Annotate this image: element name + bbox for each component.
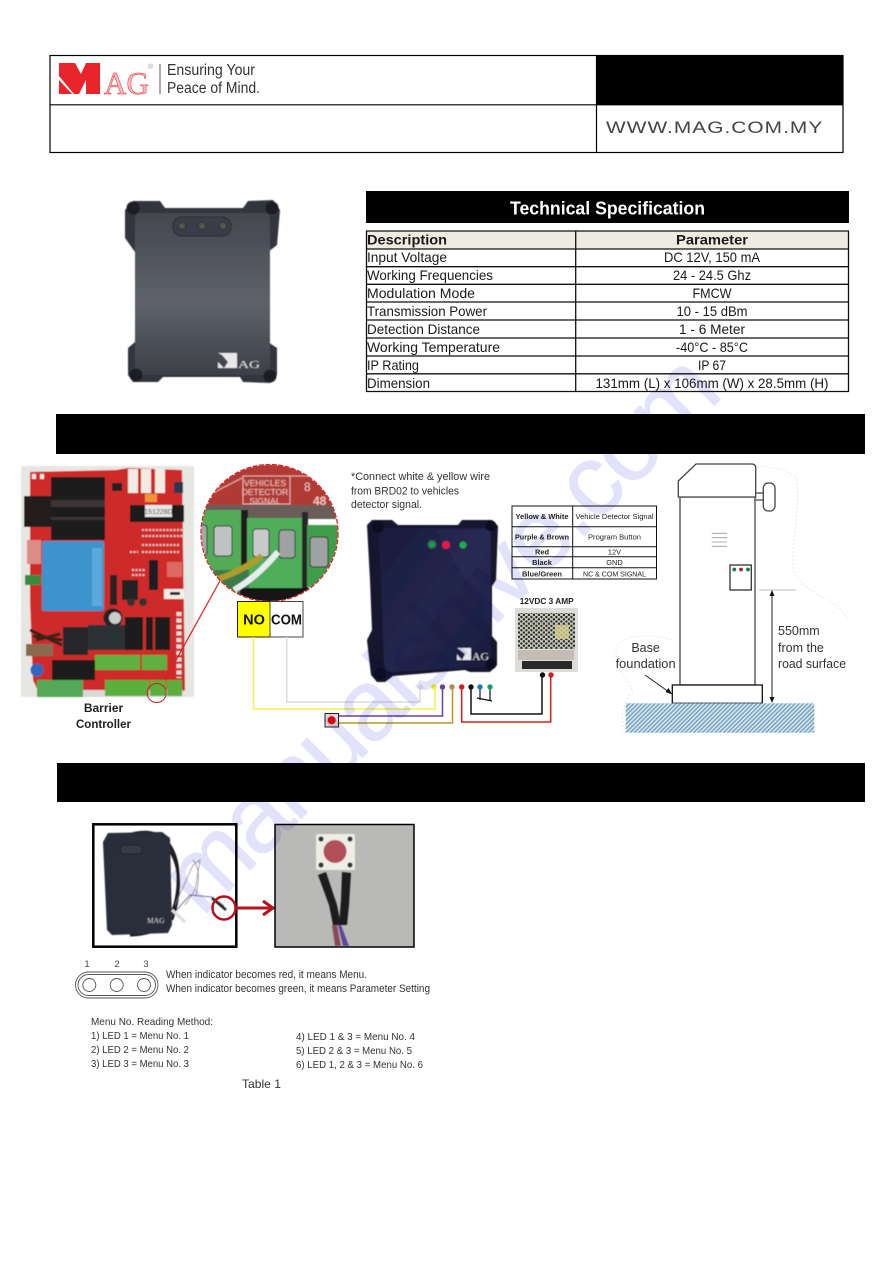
- connection note: [351, 471, 490, 511]
- wire colour table: Purple & Brown: [515, 532, 569, 542]
- barrier controller label: Barrier: [84, 701, 124, 715]
- printed board text: [242, 478, 327, 508]
- BRD02 device with LEDs: [367, 520, 498, 682]
- base foundation label: Base: [631, 641, 660, 655]
- table caption: Table 1: [242, 1077, 281, 1091]
- photo: push button: [275, 824, 414, 947]
- blue transformer: [42, 541, 104, 611]
- specification table: 24 - 24.5 Ghz: [673, 267, 751, 283]
- ic chip: [130, 505, 184, 522]
- base foundation block: [672, 685, 762, 703]
- NO COM terminal labels: NO: [243, 612, 265, 628]
- MAG logo: AG: [104, 65, 149, 101]
- device logo: [457, 648, 489, 663]
- green terminals: [37, 655, 182, 697]
- specification table: Dimension: [367, 375, 430, 391]
- height label: 550mm: [778, 624, 820, 638]
- specification table: Transmission Power: [367, 303, 487, 319]
- specification table: -40°C - 85°C: [676, 339, 748, 355]
- sensor on barrier: [730, 565, 751, 590]
- power supply: 12VDC 3 AMP: [520, 596, 574, 606]
- photo: device with cable: MAG: [147, 916, 165, 925]
- relays: [24, 477, 105, 540]
- technical specification heading: Technical Specification: [510, 198, 705, 218]
- wire colour table: Vehicle Detector Signal: [576, 512, 654, 521]
- menu reading method left: Menu No. Reading Method:: [91, 1016, 213, 1028]
- indicator colour explanation: When indicator becomes green, it means Parameter Setting: [166, 983, 430, 995]
- specification table: 1 - 6 Meter: [679, 321, 745, 337]
- technical specification heading: [366, 191, 849, 223]
- product photo: [125, 200, 280, 383]
- indicator colour explanation: When indicator becomes red, it means Menu.: [166, 969, 367, 981]
- NO COM terminal labels: [238, 602, 303, 637]
- wire colour table: Black: [532, 558, 553, 567]
- printed board text: DETECTOR: [242, 487, 288, 497]
- specification table: IP Rating: [367, 357, 419, 373]
- base foundation label: [616, 641, 676, 671]
- LED indicator diagram: 3: [143, 959, 149, 970]
- power supply: [515, 596, 578, 672]
- tagline: Ensuring Your: [167, 62, 255, 79]
- specification table: [366, 231, 849, 392]
- specification table: Working Frequencies: [367, 267, 493, 283]
- specification table: Input Voltage: [367, 249, 447, 265]
- specification table: 10 - 15 dBm: [676, 303, 748, 319]
- printed board text: 48: [313, 494, 327, 508]
- height label: road surface: [778, 657, 846, 671]
- NO COM terminal labels: COM: [271, 612, 302, 628]
- menu reading method right: 4) LED 1 & 3 = Menu No. 4: [296, 1031, 415, 1043]
- LED indicator diagram: 2: [114, 959, 120, 970]
- menu reading method right: [296, 1031, 423, 1071]
- ground hatch: [626, 703, 814, 733]
- product logo: AG: [238, 359, 260, 371]
- barrier controller board photo: [21, 466, 194, 697]
- program button symbol: [325, 714, 338, 727]
- height label: from the: [778, 641, 824, 655]
- connection note: from BRD02 to vehicles: [351, 486, 459, 498]
- printed board text: 8: [304, 480, 311, 494]
- menu reading method left: [91, 1016, 213, 1070]
- LED indicator diagram: [76, 959, 158, 998]
- foundation arrow: [645, 675, 672, 694]
- small components: [25, 530, 184, 678]
- device logo: AG: [472, 651, 489, 663]
- product logo: [218, 353, 260, 371]
- menu reading method right: 5) LED 2 & 3 = Menu No. 5: [296, 1045, 412, 1057]
- specification table: Modulation Mode: [367, 285, 475, 301]
- photo: device with cable: [93, 824, 236, 947]
- specification table: FMCW: [692, 285, 732, 301]
- menu reading method left: 3) LED 3 = Menu No. 3: [91, 1058, 189, 1070]
- highlight ring: [212, 896, 236, 920]
- specification table: DC 12V, 150 mA: [664, 249, 761, 265]
- watermark: manualshive.com: [138, 331, 741, 934]
- connection note: *Connect white & yellow wire: [351, 471, 490, 483]
- indicator colour explanation: [166, 969, 430, 995]
- section bar: programming: [57, 763, 865, 802]
- specification table: Parameter: [676, 232, 749, 248]
- section bar: wiring: [56, 414, 865, 454]
- red arrow to button: [236, 901, 273, 915]
- MAG logo: ®: [148, 63, 154, 71]
- wire terminal dots: [418, 672, 554, 690]
- barrier controller label: [76, 701, 131, 731]
- tagline: Peace of Mind.: [167, 80, 260, 97]
- specification table: Description: [367, 232, 447, 248]
- menu reading method right: 6) LED 1, 2 & 3 = Menu No. 6: [296, 1059, 423, 1071]
- base foundation label: foundation: [616, 657, 676, 671]
- height arrow: [759, 590, 796, 703]
- specification table: Detection Distance: [367, 321, 480, 337]
- wire colour table: [512, 506, 656, 579]
- terminal close-up circle: [196, 463, 341, 604]
- LEDs: [427, 540, 466, 550]
- wire colour table: Yellow & White: [516, 512, 568, 521]
- specification table: Working Temperature: [367, 339, 500, 355]
- specification table: IP 67: [698, 357, 726, 373]
- LED indicator diagram: 1: [84, 959, 90, 970]
- menu reading method left: 2) LED 2 = Menu No. 2: [91, 1044, 189, 1056]
- callout line and target circle: [147, 579, 221, 702]
- header table: [50, 55, 843, 153]
- wire colour table: Program Button: [588, 532, 641, 542]
- printed board text: VEHICLES: [244, 478, 286, 488]
- website: WWW.MAG.COM.MY: [606, 119, 823, 137]
- capacitor: [104, 608, 122, 628]
- specification table: 131mm (L) x 106mm (W) x 28.5mm (H): [596, 375, 828, 391]
- infographic page: [20, 54, 865, 1088]
- white connectors: [112, 469, 183, 502]
- black relay row: [63, 617, 170, 655]
- wire colour table: NC & COM SIGNAL: [583, 570, 646, 578]
- wire colour table: 12V: [608, 548, 621, 556]
- connection note: detector signal.: [351, 499, 422, 511]
- MAG logo: [59, 63, 160, 101]
- wire colour table: Blue/Green: [522, 570, 562, 578]
- ic chip: 151228D: [144, 509, 173, 516]
- barrier gate side drawing: [616, 464, 848, 733]
- height label: [778, 624, 846, 671]
- barrier controller label: Controller: [76, 717, 131, 731]
- printed board text: SIGNAL: [249, 496, 281, 506]
- inductor: [26, 630, 95, 680]
- wire colour table: GND: [606, 558, 623, 567]
- wiring diagram: [254, 637, 554, 723]
- tagline: [167, 62, 260, 97]
- menu reading method left: 1) LED 1 = Menu No. 1: [91, 1030, 189, 1042]
- wire colour table: Red: [535, 548, 549, 556]
